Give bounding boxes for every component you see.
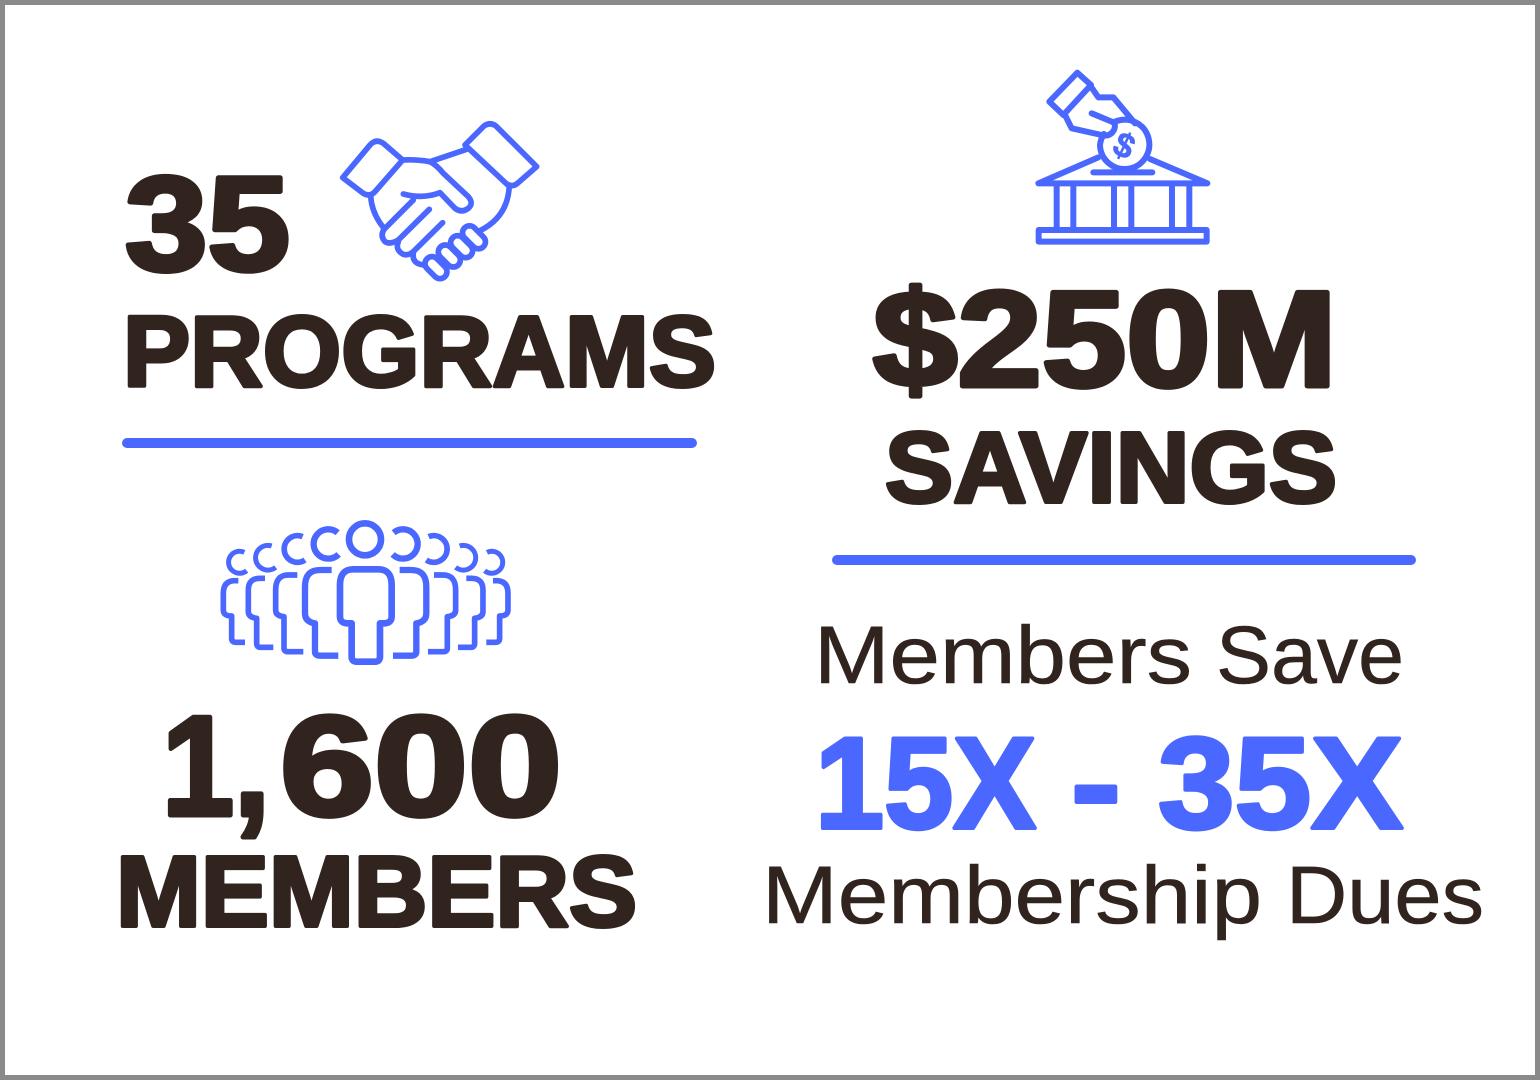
label: programs: PROGRAMS <box>123 296 716 408</box>
panel: dues multiple <box>762 610 1484 941</box>
panel: members <box>116 523 637 948</box>
stat: 15X - 35X: 15X <box>815 710 1036 856</box>
stat: 15X - 35X: - <box>1071 710 1121 856</box>
icon: hand dropping coin into bank <box>1038 73 1207 242</box>
stat: $250M: $250M <box>873 263 1337 415</box>
stat: 35: 35 <box>125 150 290 299</box>
text: membership dues: Membership <box>762 850 1262 941</box>
label: members: MEMBERS <box>116 836 637 948</box>
label: savings: SAVINGS <box>885 412 1337 524</box>
stat: 1,600: 1, <box>162 687 270 846</box>
stat: 15X - 35X: 35X <box>1158 710 1403 856</box>
icon: handshake <box>343 124 537 282</box>
divider: left <box>122 438 697 448</box>
stat: 1,600: 600 <box>280 687 562 846</box>
icon: group of people <box>223 523 508 662</box>
panel: programs <box>123 124 716 408</box>
text: membership dues: Dues <box>1286 850 1484 941</box>
icon: dollar sign on coin: $ <box>1107 125 1141 168</box>
text: members save: Save <box>1216 610 1404 701</box>
text: members save: Members <box>814 610 1192 701</box>
panel: savings <box>873 73 1337 524</box>
divider: right <box>832 555 1416 565</box>
